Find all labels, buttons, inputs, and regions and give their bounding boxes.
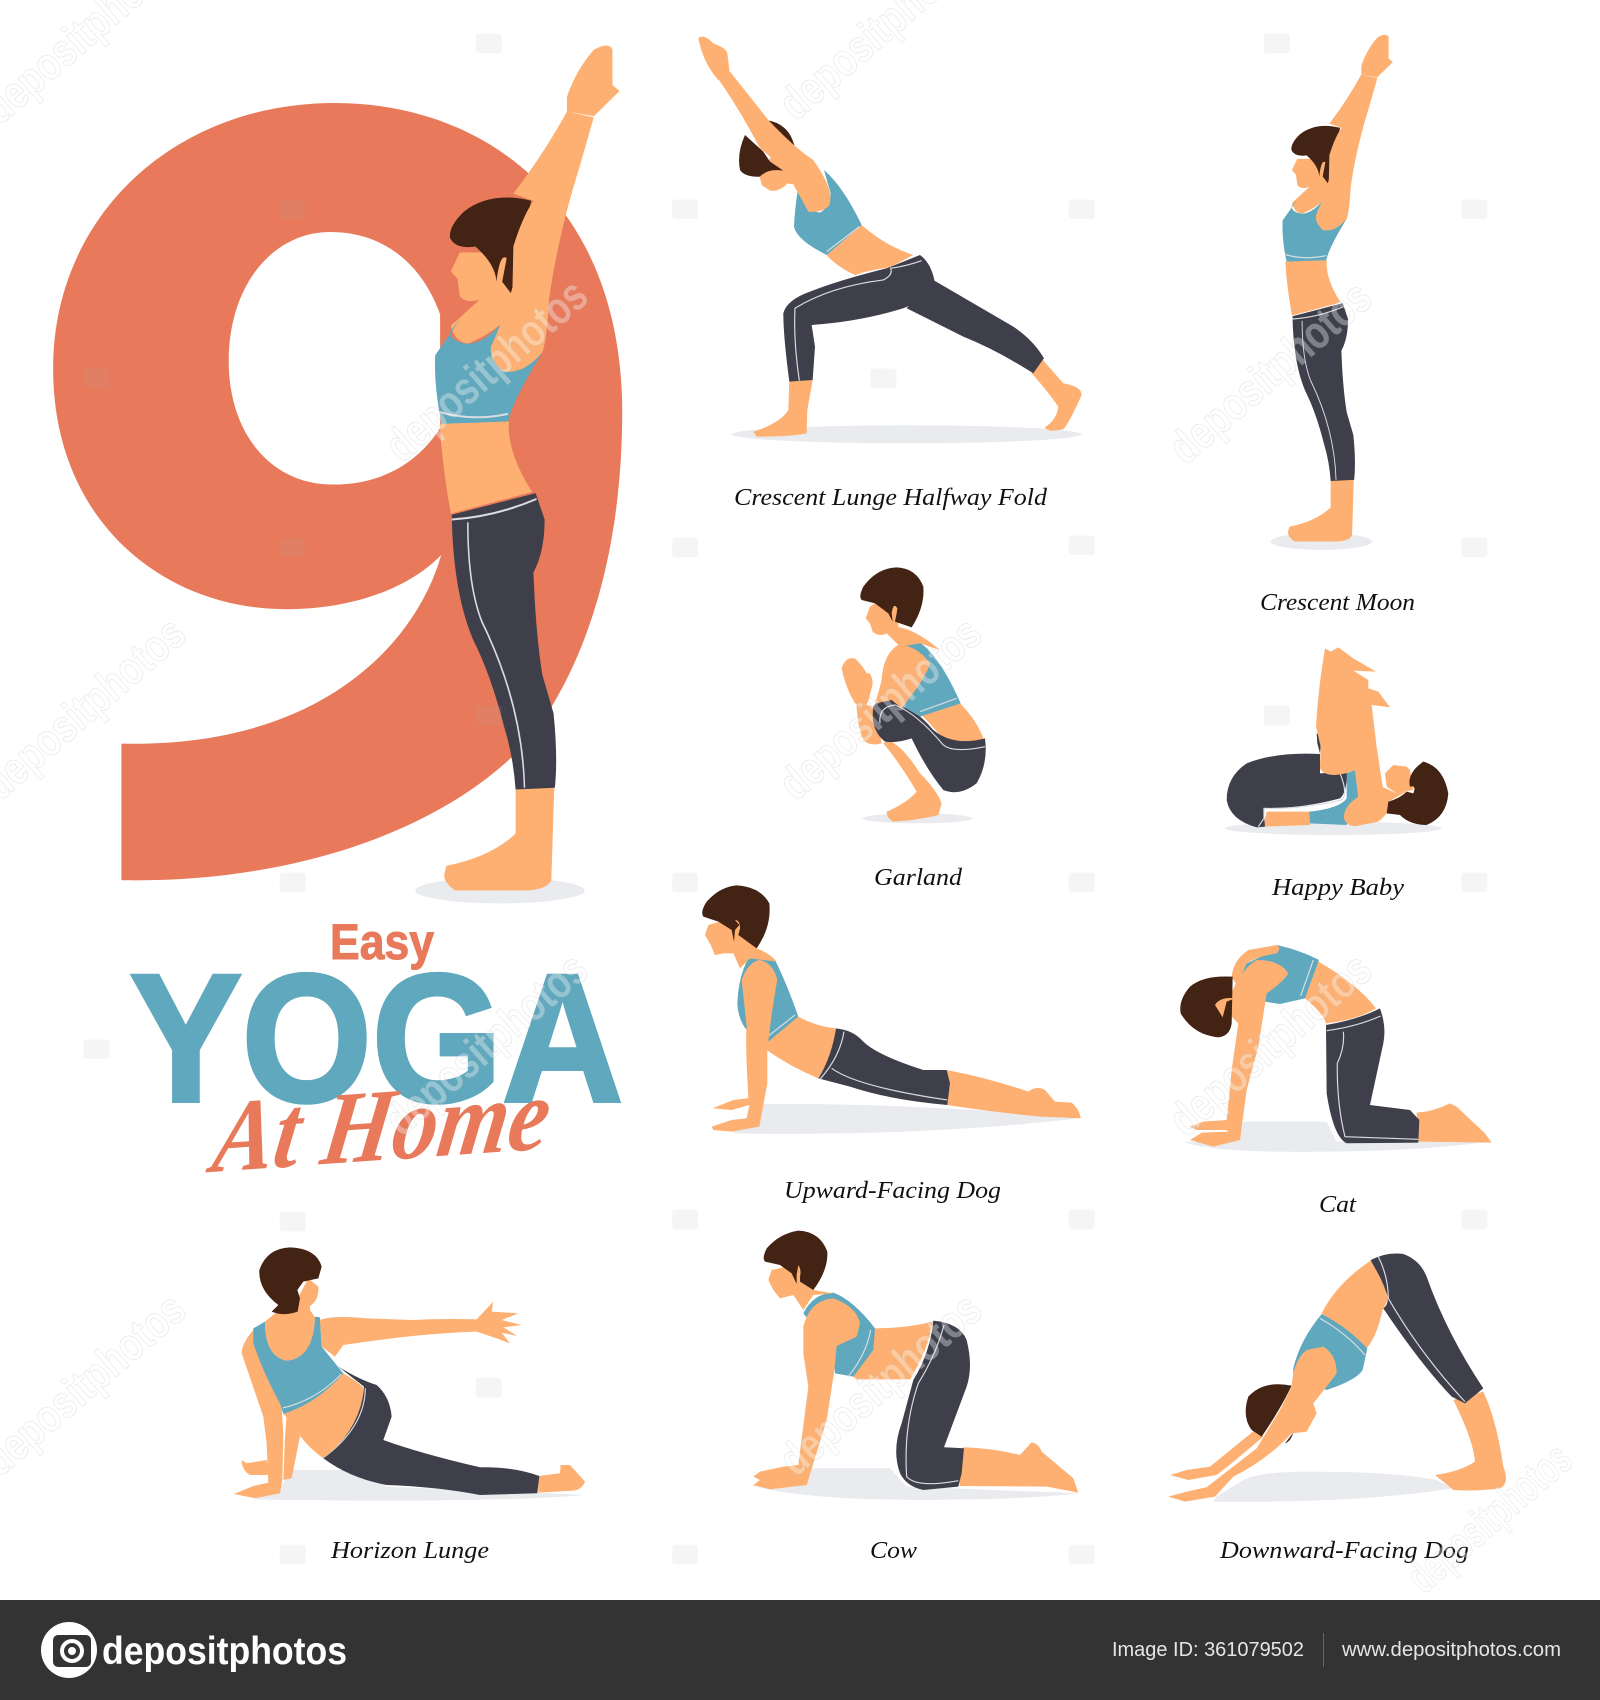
footer bar [0, 1600, 1600, 1700]
figure: garland [842, 567, 986, 823]
figure: horizon lunge [234, 1247, 587, 1501]
figure: cow [750, 1231, 1080, 1500]
pose: Cow [750, 1231, 1080, 1564]
figure: upward dog [702, 885, 1081, 1134]
website url: www.depositphotos.com [1341, 1639, 1561, 1661]
figure: happy baby [1225, 647, 1448, 835]
pose: Horizon Lunge [234, 1247, 587, 1564]
logo wordmark: depositphotos [102, 1630, 347, 1673]
title: Easy Yoga At Home [130, 914, 623, 1196]
caption: Upward-Facing Dog [784, 1178, 1001, 1204]
caption: Downward-Facing Dog [1219, 1538, 1469, 1564]
caption: Cat [1319, 1192, 1357, 1218]
icon: depositphotos camera logo [41, 1622, 97, 1678]
pose: Downward-Facing Dog [1168, 1253, 1506, 1564]
figure: crescent lunge [698, 37, 1082, 443]
pose: Happy Baby [1225, 647, 1448, 901]
watermark layer: depositphotos [768, 606, 991, 810]
pose: main standing figure [415, 45, 620, 903]
figure: crescent moon [1271, 35, 1393, 550]
heading: YOGA: YOGA [130, 936, 623, 1140]
heading: Easy: Easy [330, 914, 434, 970]
big number 9 [53, 103, 622, 880]
figure: cat [1180, 945, 1492, 1152]
caption: Happy Baby [1271, 875, 1404, 901]
caption: Garland [874, 865, 963, 891]
caption: Horizon Lunge [330, 1538, 489, 1564]
watermark layer: depositphotos [1158, 270, 1381, 474]
caption: Crescent Moon [1260, 590, 1415, 616]
caption: Cow [870, 1538, 917, 1564]
pose: Upward-Facing Dog [702, 885, 1081, 1204]
watermark layer: depositphotos [768, 1282, 991, 1486]
pose: Cat [1180, 945, 1492, 1218]
pose: Crescent Moon [1260, 35, 1415, 616]
image id: Image ID: 361079502 [1112, 1639, 1304, 1661]
heading: At Home: At Home [201, 1057, 558, 1196]
figure: downward dog [1168, 1253, 1506, 1502]
watermark layer: depositphotos [1158, 942, 1381, 1146]
watermark layer: depositphotos [374, 942, 597, 1146]
pose: Crescent Lunge Halfway Fold [698, 37, 1082, 511]
caption: Crescent Lunge Halfway Fold [734, 485, 1048, 511]
pose: Garland [842, 567, 986, 891]
watermark layer: depositphotos [374, 268, 597, 472]
